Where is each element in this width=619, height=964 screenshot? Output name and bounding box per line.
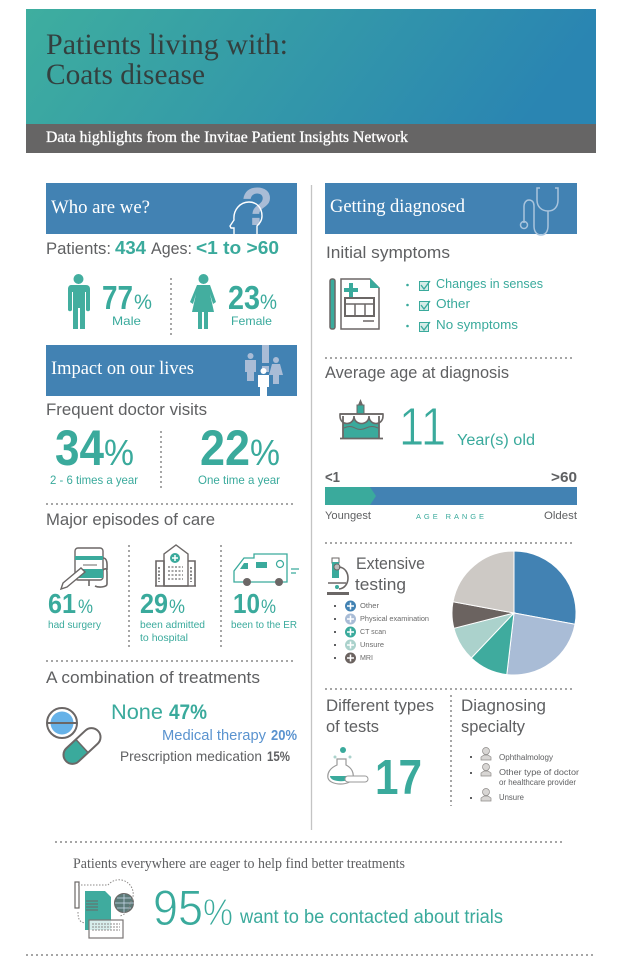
treatment: none: 47%: [169, 701, 207, 724]
patient counts: 434: [115, 238, 146, 258]
stat: 22%: %: [250, 432, 280, 473]
pie legend: CT scan: [360, 629, 386, 636]
title: Coats disease: [46, 58, 205, 91]
stat: 11 years old: [399, 397, 535, 457]
symptom list: Other: [436, 297, 470, 311]
stat: 23% female: Female: [231, 314, 272, 328]
heading: diagnosing specialty: [461, 696, 546, 736]
heading: average age at diagnosis: Average age at diagnosis: [325, 363, 509, 382]
age range bar: <1: [325, 469, 340, 486]
pie chart: [452, 551, 576, 675]
icon: documents and globe: [75, 880, 134, 938]
age range bar: AGE RANGE: [416, 512, 484, 521]
stat: 10% er: been to the ER: [231, 619, 297, 631]
heading: initial symptoms: Initial symptoms: [326, 243, 450, 262]
stat: 34%: 2 - 6 times a year: [50, 473, 138, 487]
heading: different types of tests: of tests: [326, 717, 379, 736]
stat: 29% hospital: %: [169, 597, 185, 618]
heading: diagnosing specialty: Diagnosing: [461, 696, 546, 715]
icon: pills: [47, 708, 104, 768]
heading: who are we: Who are we?: [51, 197, 150, 218]
icon: family with exclamation: [245, 345, 283, 396]
title: [46, 28, 288, 91]
specialty list: [470, 748, 579, 802]
age range bar: [325, 469, 577, 522]
stat: 10% er: 10: [233, 588, 260, 619]
stat: 34%: %: [104, 432, 134, 473]
specialty list: Unsure: [499, 793, 525, 802]
stat: 29% hospital: 29: [140, 588, 168, 619]
treatment: medical therapy: Medical therapy: [162, 728, 267, 744]
heading: diagnosing specialty: specialty: [461, 717, 525, 736]
icon: female: [190, 274, 216, 329]
stat: 95% want to be contacted: 95: [153, 880, 203, 936]
panel: impact on our lives: [46, 345, 297, 396]
age range bar: Youngest: [325, 510, 371, 522]
stat: 61% surgery: 61: [48, 588, 76, 619]
heading: extensive testing: Extensive: [356, 554, 425, 573]
stat: 10% er: %: [261, 597, 276, 618]
icon: head with question mark: ?: [241, 177, 273, 237]
heading: different types of tests: Different types: [326, 696, 434, 715]
icon: male: [68, 274, 90, 329]
stat: 77% male: %: [134, 291, 152, 314]
pie legend: MRI: [360, 655, 373, 662]
patient counts: Ages:: [151, 239, 192, 258]
stat: 22%: [198, 420, 280, 487]
stat: 77% male: 77: [102, 279, 133, 316]
treatment: medical therapy: 20%: [271, 728, 297, 744]
age range bar: >60: [551, 469, 577, 486]
symptom list: Changes in senses: [436, 277, 543, 291]
pie legend: Unsure: [360, 642, 384, 649]
treatment: none: [111, 701, 207, 724]
stat: 17: 17: [375, 751, 422, 805]
heading: major episodes of care: Major episodes of care: [46, 510, 215, 529]
stat: 22%: 22: [200, 420, 250, 476]
callout: eager to help: Patients everywhere are eager to help find better treatments: [73, 856, 405, 872]
patient counts: <1 to >60: [196, 238, 279, 258]
icon: microscope: [327, 558, 349, 595]
stat: 11 years old: 11: [399, 397, 446, 457]
icon: flask: [328, 747, 368, 784]
icon: ambulance: [234, 554, 299, 586]
heading: different types of tests: [326, 696, 434, 736]
pie legend: Physical examination: [360, 616, 429, 623]
panel: who are we: [46, 177, 297, 237]
stat: 29% hospital: been admitted: [140, 619, 205, 631]
column divider: [310, 185, 312, 830]
pie legend: Other: [360, 603, 380, 610]
patient counts: Patients:: [46, 239, 111, 258]
stat: 77% male: [102, 279, 152, 328]
heading: extensive testing: [355, 554, 425, 594]
header banner: [26, 9, 596, 153]
icon: birthday cake: [340, 399, 383, 438]
heading: extensive testing: testing: [355, 575, 406, 594]
icon: stethoscope: [520, 188, 558, 235]
symptom list: No symptoms: [436, 318, 518, 332]
icon: iv bag surgery: [61, 548, 107, 589]
specialty list: Ophthalmology: [499, 753, 553, 762]
specialty list: Other type of doctor: [499, 768, 579, 777]
stat: 95% want to be contacted: [153, 880, 503, 936]
treatment: none: None: [111, 701, 163, 724]
symptom list: [406, 277, 543, 332]
icon: medical form and pen: [330, 278, 380, 329]
subtitle: Data highlights from the Invitae Patient Insights Network: [46, 129, 408, 146]
stat: 23% female: [228, 279, 277, 328]
icon: hospital: [155, 545, 196, 586]
stat: 23% female: 23: [228, 279, 260, 316]
stat: 22%: One time a year: [198, 473, 280, 487]
stat: 29% hospital: [140, 588, 205, 644]
stat: 34%: [50, 420, 138, 487]
treatment: prescription medication: 15%: [267, 748, 290, 764]
stat: 61% surgery: %: [78, 597, 93, 618]
specialty list: or healthcare provider: [499, 778, 576, 787]
title: Patients living with:: [46, 28, 288, 61]
stat: 95% want to be contacted: %: [203, 892, 233, 934]
stat: 77% male: Male: [112, 314, 141, 328]
treatment: prescription medication: Prescription medication: [120, 748, 262, 764]
stat: 95% want to be contacted: want to be contacted about trials: [239, 907, 503, 928]
stat: 61% surgery: [48, 588, 102, 631]
age range bar: Oldest: [544, 510, 577, 522]
heading: impact: Impact on our lives: [51, 358, 194, 379]
pie legend: [334, 600, 429, 664]
stat: 61% surgery: had surgery: [48, 619, 102, 631]
stat: 10% er: [231, 588, 297, 631]
stat: 34%: 34: [55, 420, 104, 476]
stat: 23% female: %: [260, 291, 277, 314]
heading: combination of treatments: A combination of treatments: [46, 668, 260, 687]
heading: frequent doctor visits: Frequent doctor visits: [46, 400, 207, 419]
panel: getting diagnosed: [325, 183, 577, 235]
stat: 29% hospital: to hospital: [140, 632, 188, 644]
heading: getting diagnosed: Getting diagnosed: [330, 196, 465, 217]
stat: 11 years old: Year(s) old: [457, 432, 535, 449]
patient counts: [46, 238, 279, 258]
